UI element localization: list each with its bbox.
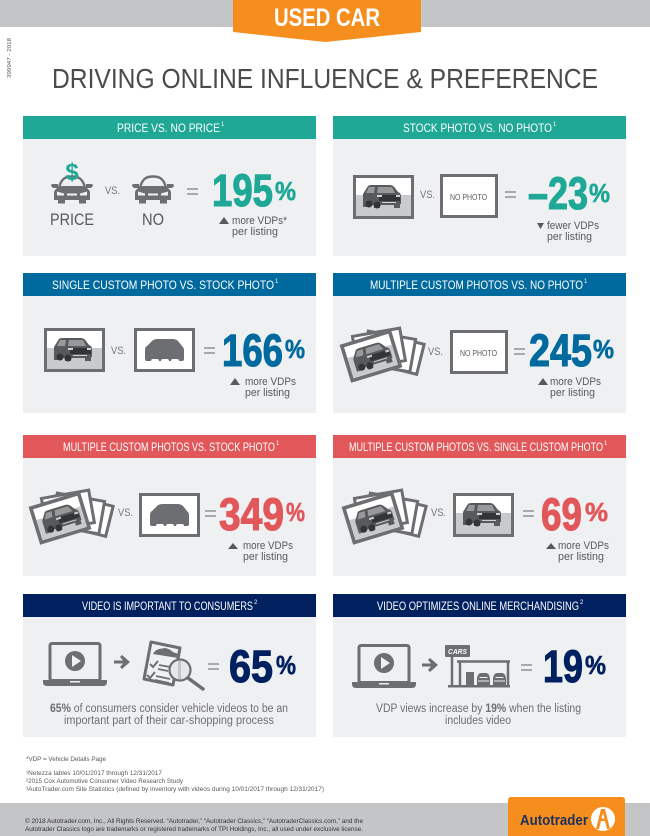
header: VIDEO OPTIMIZES ONLINE MERCHANDISING [377,599,579,613]
description [50,703,288,727]
description: important part of their car-shopping process [64,715,274,727]
header: 1 [553,122,557,128]
header [23,435,316,458]
header [23,594,316,617]
vs: VS. [428,346,443,358]
logo: autotrader [508,797,625,836]
panel: video optimizes [333,594,626,737]
caption [230,376,296,399]
arrow [422,658,438,672]
stat: 69%: 69 [541,489,582,540]
stat: 349%: 349 [219,489,284,540]
header: 1 [604,441,608,447]
arrow [114,655,130,669]
icon: car with price: $ [65,159,79,186]
caption: more VDPs [243,540,293,552]
top band [0,0,650,27]
caption: per listing [232,226,278,238]
icon: laptop [352,646,416,688]
stat: -23%: % [589,178,610,208]
header: 1 [276,441,280,447]
header: MULTIPLE CUSTOM PHOTOS VS. NO PHOTO [370,278,583,292]
stat: 195%: 195 [212,165,273,216]
header: 2 [254,600,258,606]
footnotes: ¹Netezza tables 10/01/2017 through 12/31/2017 [26,771,163,777]
caption [219,215,288,238]
description: includes video [445,715,511,727]
header: VIDEO IS IMPORTANT TO CONSUMERS [82,599,253,613]
icon: stock photo [354,176,412,218]
header: 1 [584,279,588,285]
panel: video important [23,594,316,737]
footer band [0,803,650,836]
caption: fewer VDPs [547,220,599,232]
equals [204,347,215,354]
header [333,116,626,139]
vs: VS. [111,345,126,357]
banner: used car: USED CAR [274,4,380,32]
caption: more VDPs [245,376,296,388]
stat: 245%: % [593,334,614,364]
caption: per listing [550,387,595,399]
equals [523,510,534,517]
icon: no photo [442,176,496,216]
icon: checklist with magnifier [144,642,203,689]
icon: car no price [132,176,174,204]
caption [538,376,601,399]
icon: dealership [445,645,510,688]
legal text: Autotrader Classics logo are trademarks or registered trademarks of TPI Holdings, Inc., all used under exclusive license. [25,827,363,833]
stat: 69%: % [585,497,608,527]
caption: per listing [243,551,288,563]
header: PRICE VS. NO PRICE [117,121,220,135]
caption: per listing [547,231,592,243]
stat: 166%: % [285,334,305,364]
icon: custom photo [454,494,512,536]
icon: car with price [51,159,93,204]
stat: 349%: % [286,497,305,527]
header: 1 [275,279,279,285]
description: VDP views increase by 19% when the listing [376,703,581,715]
caption [546,540,609,563]
icon: no photo [452,332,506,372]
stat: 65%: % [276,650,296,680]
equals [521,664,532,671]
equals [514,348,525,355]
footnotes: ²2015 Cox Automotive Consumer Video Research Study [26,779,183,785]
icon: stock photo [136,330,194,370]
legal text: © 2018 Autotrader.com, Inc., All Rights Reserved. “Autotrader,” “Autotrader Classics,” “AutotraderClassics.com,” and the [25,818,364,825]
panel: multiple custom vs no photo [333,273,626,413]
header [333,435,626,458]
vs: VS. [420,189,435,201]
stat: 65%: 65 [229,641,273,692]
caption: more VDPs [550,376,601,388]
icon: stock photo [140,494,198,536]
caption: per listing [558,551,604,563]
footnotes: ³AutoTrader.com Site Statistics (defined by inventory with videos during 10/01/2017 through 12/31/2017) [26,787,324,793]
equals [205,510,216,517]
stat: 19%: % [585,650,606,680]
panel: stock photo vs no photo [333,116,626,256]
equals [208,663,219,670]
icon: photo stack [342,328,424,381]
footnotes: *VDP = Vehicle Details Page [26,757,107,763]
description [376,703,581,727]
caption: per listing [245,387,290,399]
header: MULTIPLE CUSTOM PHOTOS VS. STOCK PHOTO [63,440,275,454]
banner: used car [233,0,421,42]
stat: 19%: 19 [543,641,583,692]
stat: 166%: 166 [222,325,283,376]
icon: custom photo [46,330,104,370]
header [23,116,316,139]
header [333,594,626,617]
caption: more VDPs [558,540,609,552]
vs: VS. [118,507,133,519]
stat: 245%: 245 [529,325,592,376]
caption [228,540,293,563]
icon: dealership: CARS [448,647,467,656]
icon: photo stack [31,490,113,543]
caption [537,220,599,243]
header [23,273,316,296]
panel: single custom vs stock [23,273,316,413]
panel: multiple custom vs single custom [333,435,626,576]
footnotes [26,757,324,793]
header [333,273,626,296]
description: 65% of consumers consider vehicle videos to be an [50,703,288,715]
stat: 195%: % [275,176,296,206]
header: STOCK PHOTO VS. NO PHOTO [403,121,552,135]
logo: autotrader: Autotrader [520,812,588,829]
caption: more VDPs* [232,215,288,227]
vs: VS. [105,185,120,197]
document code: 399947 - 2018 [7,38,13,78]
label: no: NO [142,210,164,229]
equals [187,188,198,195]
legal text [25,818,364,833]
label: price: PRICE [50,210,94,229]
vs: VS. [431,507,446,519]
header: SINGLE CUSTOM PHOTO VS. STOCK PHOTO [52,278,274,292]
header: 1 [221,122,225,128]
panel: multiple custom vs stock [23,435,316,576]
equals [505,191,516,198]
icon: laptop [43,644,107,686]
header: 2 [580,600,584,606]
stat: -23%: –23 [528,168,588,219]
panel: price vs no price [23,116,316,256]
icon: photo stack [344,490,426,543]
